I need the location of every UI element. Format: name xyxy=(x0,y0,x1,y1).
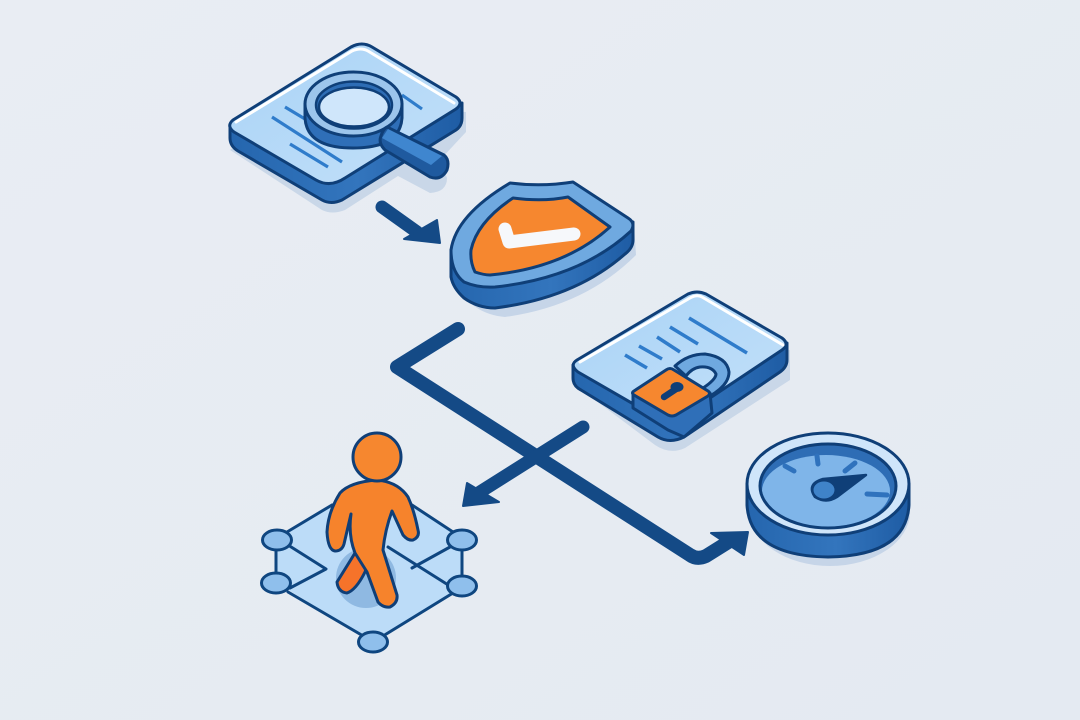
icon: walking person on network grid xyxy=(262,433,476,652)
person figure xyxy=(327,433,418,607)
icon: document with padlock xyxy=(573,292,790,451)
icon: speed gauge xyxy=(747,433,910,566)
icon: document with magnifying glass xyxy=(230,44,466,212)
arrow: padlock to person xyxy=(463,427,583,506)
icon: shield with check mark xyxy=(451,182,636,317)
arrow: document to shield xyxy=(382,207,440,243)
arrow: main connector to gauge xyxy=(397,329,748,558)
network platform xyxy=(262,505,476,652)
